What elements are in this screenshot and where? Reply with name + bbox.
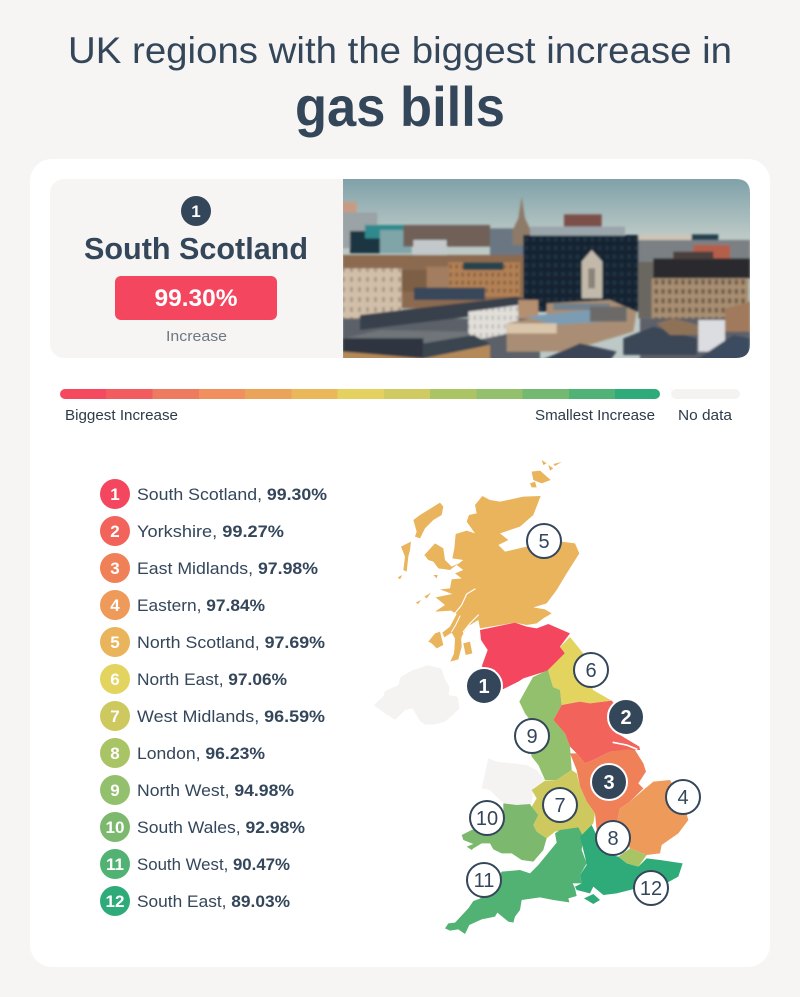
- region: Yorkshire: [553, 701, 640, 763]
- no data swatch: [671, 389, 740, 399]
- panel: main card: [30, 159, 770, 967]
- title: [68, 30, 732, 138]
- item 2: 2: [110, 522, 120, 541]
- item 9: North West, 94.98%: [137, 781, 294, 800]
- item 8: 8: [110, 744, 120, 763]
- title: gas bills: [295, 75, 505, 138]
- region: South Scotland: [480, 623, 570, 689]
- item 4: 4: [110, 596, 120, 615]
- item 11: South West, 90.47%: [137, 855, 290, 874]
- item 10: [100, 812, 305, 842]
- marker 1: 1: [478, 676, 490, 698]
- UK map: [377, 460, 700, 934]
- region: West Midlands: [532, 770, 595, 838]
- item 3: 3: [110, 559, 120, 578]
- marker 12: [634, 871, 668, 905]
- legend: colour scale: [60, 389, 740, 424]
- increase label: Increase: [166, 328, 227, 345]
- region: East Midlands: [570, 749, 646, 830]
- item 1: 1: [110, 485, 120, 504]
- marker 12: 12: [640, 878, 662, 900]
- ranked list: [100, 479, 327, 916]
- item 8: [100, 738, 265, 768]
- item 8: London, 96.23%: [137, 744, 265, 763]
- legend labels: Biggest Increase: [65, 407, 178, 424]
- marker 8: 8: [607, 828, 619, 850]
- item 3: East Midlands, 97.98%: [137, 559, 318, 578]
- region: South Wales: [462, 803, 547, 862]
- region: South East: [575, 825, 683, 895]
- region: North Scotland: [398, 460, 579, 662]
- panel: top region highlight: [50, 179, 360, 358]
- marker 2: 2: [620, 707, 632, 729]
- marker 5: 5: [538, 531, 550, 553]
- percent badge: 99.30%: [154, 285, 238, 312]
- marker 6: [574, 653, 608, 687]
- item 11: 11: [106, 855, 124, 874]
- marker 1: [466, 668, 502, 704]
- marker 4: [666, 780, 700, 814]
- marker 9: 9: [526, 726, 538, 748]
- item 10: South Wales, 92.98%: [137, 818, 305, 837]
- item 6: [100, 664, 287, 694]
- item 4: [100, 590, 265, 620]
- item 2: Yorkshire, 99.27%: [137, 522, 284, 541]
- marker 7: 7: [554, 795, 566, 817]
- item 5: North Scotland, 97.69%: [137, 633, 325, 652]
- region: London: [618, 848, 647, 867]
- region: Isle of Wight: [584, 894, 600, 904]
- item 11: [100, 849, 290, 879]
- item 2: [100, 516, 284, 546]
- item 10: 10: [106, 818, 124, 837]
- legend labels: Smallest Increase: [535, 407, 655, 424]
- marker 10: [470, 801, 504, 835]
- item 7: 7: [110, 707, 120, 726]
- item 1: South Scotland, 99.30%: [137, 485, 327, 504]
- item 7: West Midlands, 96.59%: [137, 707, 325, 726]
- item 6: 6: [110, 670, 120, 689]
- region: Northern Ireland (no data): [377, 667, 457, 723]
- region name: South Scotland: [84, 231, 308, 266]
- legend labels: No data: [678, 407, 733, 424]
- marker 3: [591, 764, 627, 800]
- item 9: [100, 775, 294, 805]
- item 12: 12: [106, 892, 124, 911]
- region: North West: [519, 670, 572, 780]
- percent badge: [115, 276, 277, 320]
- marker 10: 10: [476, 808, 498, 830]
- item 5: 5: [110, 633, 120, 652]
- item 9: 9: [110, 781, 120, 800]
- rank badge: 1: [191, 202, 201, 221]
- marker 5: [527, 524, 561, 558]
- region: South West: [445, 827, 587, 934]
- item 6: North East, 97.06%: [137, 670, 287, 689]
- title: UK regions with the biggest increase in: [68, 30, 732, 71]
- region: North Wales (no data): [482, 758, 545, 805]
- marker 3: 3: [603, 772, 615, 794]
- item 12: [100, 886, 290, 916]
- marker 11: [467, 863, 501, 897]
- legend labels: [65, 407, 733, 424]
- rank badge: [181, 196, 211, 226]
- item 12: South East, 89.03%: [137, 892, 290, 911]
- marker 4: 4: [677, 787, 689, 809]
- item 7: [100, 701, 325, 731]
- item 1: [100, 479, 327, 509]
- marker 7: [543, 788, 577, 822]
- item 5: [100, 627, 325, 657]
- marker 2: [608, 699, 644, 735]
- item 4: Eastern, 97.84%: [137, 596, 265, 615]
- marker 6: 6: [585, 660, 597, 682]
- marker 11: 11: [474, 870, 494, 892]
- item 3: [100, 553, 318, 583]
- region: Eastern: [617, 780, 688, 855]
- marker 9: [515, 719, 549, 753]
- photo: city skyline: [343, 179, 750, 365]
- region: North East: [548, 637, 612, 705]
- marker 8: [596, 821, 630, 855]
